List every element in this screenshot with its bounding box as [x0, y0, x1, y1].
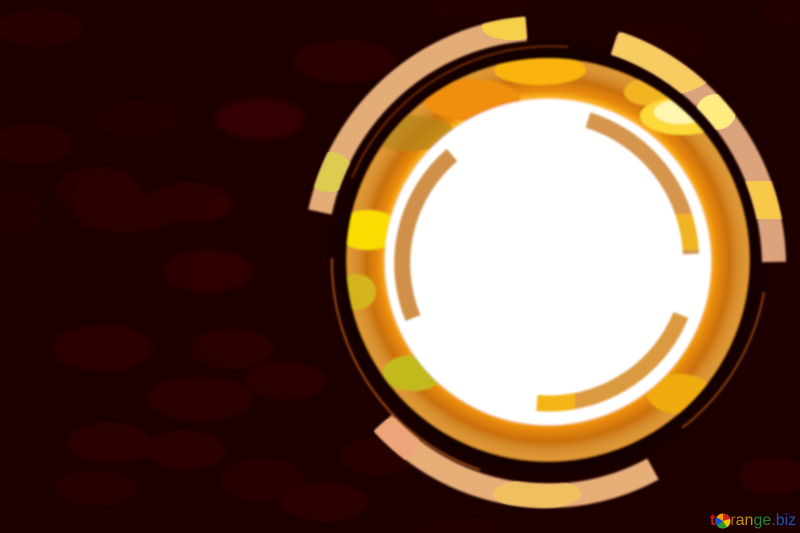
arc: top left — [320, 29, 526, 212]
thin outer ring lines — [332, 46, 764, 470]
ring colour blobs — [336, 55, 724, 414]
arc: inner top right — [588, 120, 691, 254]
main glowing ring — [336, 55, 750, 462]
arc: bottom — [383, 423, 653, 496]
dark halo behind rings — [326, 38, 770, 482]
inner arc segments — [402, 120, 705, 412]
inner arc yellow tips — [535, 214, 705, 412]
watermark logo disc — [715, 514, 730, 528]
outer arc colour patches — [305, 14, 787, 509]
outer arc segments — [305, 14, 787, 509]
arc: inner bottom — [537, 315, 681, 403]
watermark text: t range.biz — [710, 512, 796, 529]
arc: inner left — [402, 155, 452, 318]
arc: top right — [615, 43, 774, 262]
